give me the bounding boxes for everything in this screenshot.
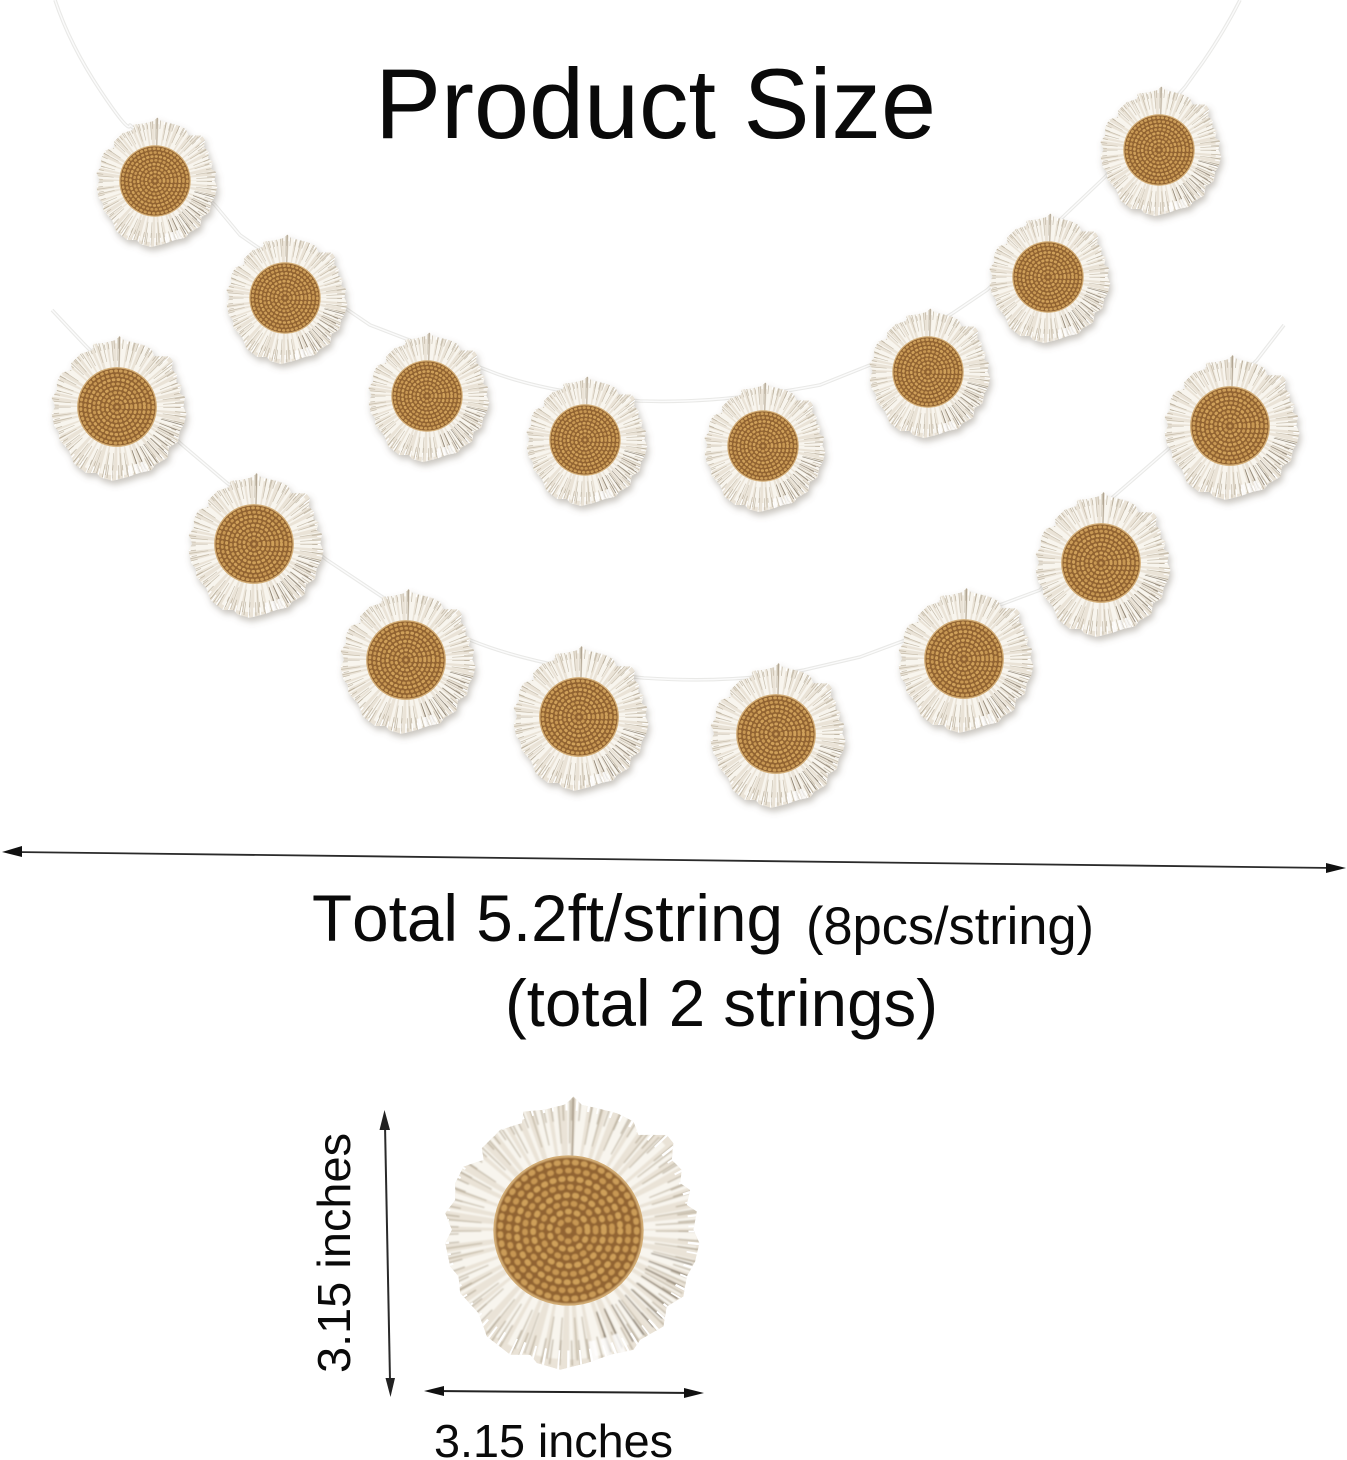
flower 2-8 (1161, 355, 1299, 500)
flower 2-7 (1032, 492, 1170, 637)
large single flower (438, 1097, 699, 1370)
flower 2-3 (337, 589, 475, 734)
title: Product Size (375, 48, 936, 159)
flower 1-3 (365, 332, 489, 462)
flower 1-5 (701, 382, 825, 512)
flower 2-6 (895, 588, 1033, 733)
flower 1-7 (986, 213, 1110, 343)
total length label: Total 5.2ft/string (312, 882, 783, 955)
string count label: (total 2 strings) (505, 967, 938, 1040)
vertical dimension arrow (380, 1110, 395, 1397)
total length arrow (2, 846, 1346, 873)
vertical dimension label: 3.15 inches (308, 1133, 360, 1373)
flower 2-1 (48, 336, 186, 481)
flower 2-5 (707, 663, 845, 808)
flower 2-4 (510, 646, 648, 791)
flower 1-2 (223, 234, 347, 364)
garland flowers (48, 86, 1299, 808)
flower 1-8 (1097, 86, 1221, 216)
flower 1-1 (93, 117, 217, 247)
garland string 1 thread (55, 0, 1240, 401)
flower 1-6 (866, 308, 990, 438)
pieces per string label: (8pcs/string) (806, 897, 1094, 956)
garland string 2 thread (52, 310, 1284, 680)
flower 2-2 (185, 473, 323, 618)
flower 1-4 (523, 376, 647, 506)
horizontal dimension arrow (424, 1386, 704, 1398)
